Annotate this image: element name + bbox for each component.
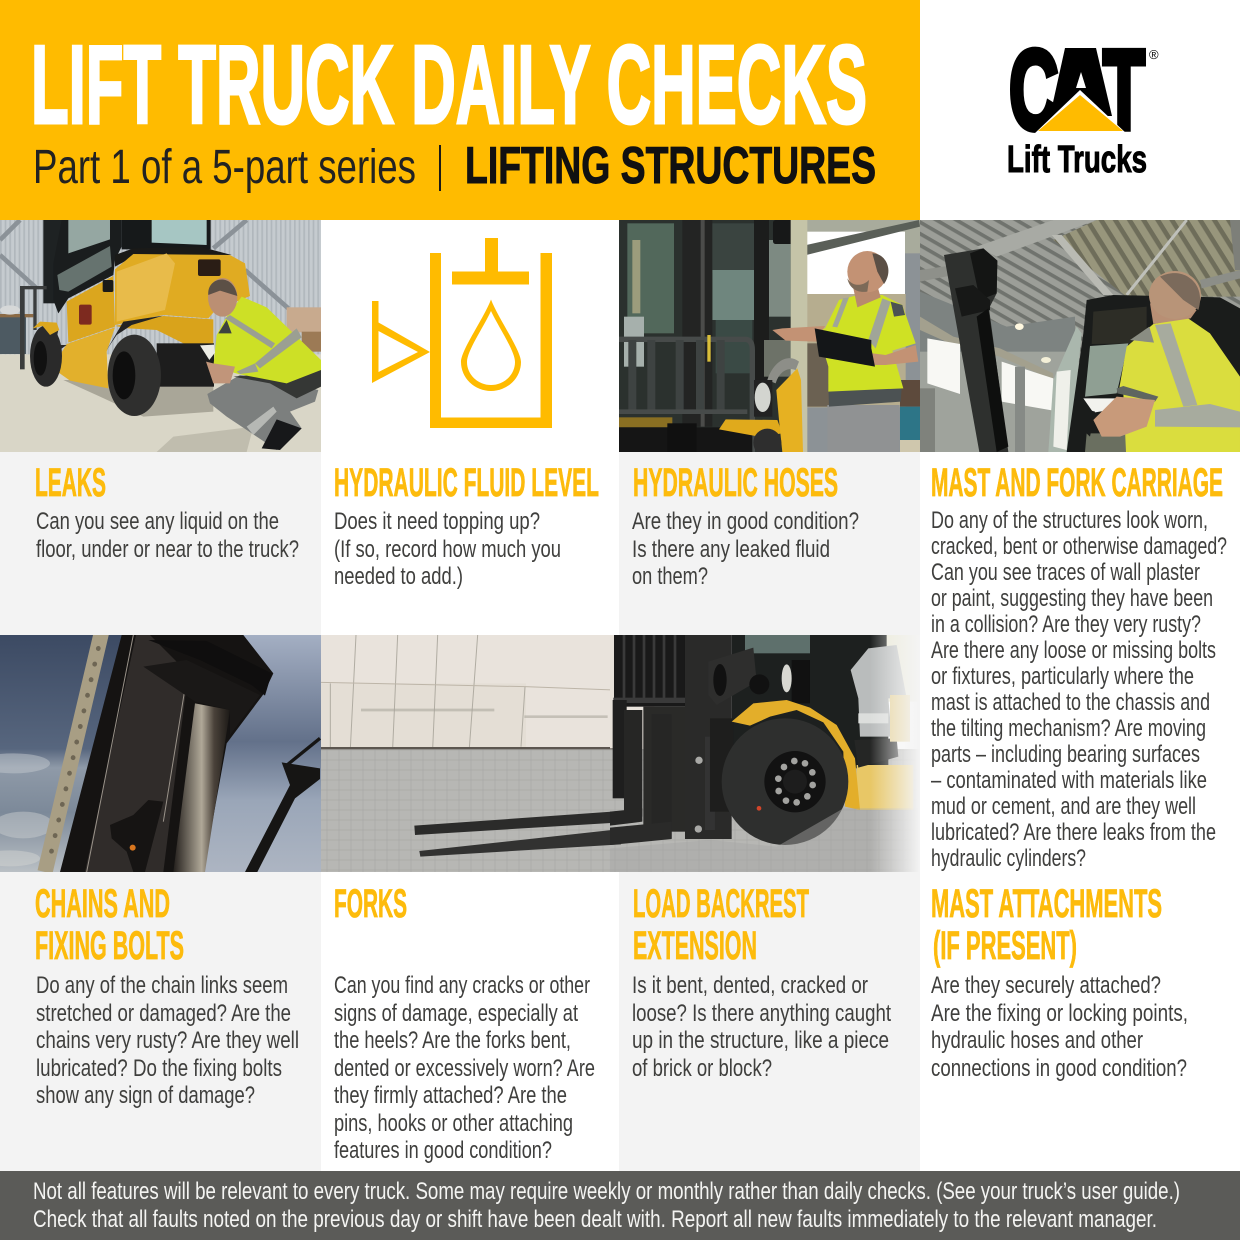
text: hydraulic fluid level: needed to add.) — [334, 563, 463, 590]
text: forks: Can you find any cracks or other — [334, 972, 590, 999]
heading: hydraulic hoses: HYDRAULIC HOSES — [633, 461, 838, 505]
text: forks: they firmly attached? Are the — [334, 1082, 567, 1109]
text: chains and fixing bolts: Do any of the chain links seem — [36, 972, 288, 999]
subtitle: topic: LIFTING STRUCTURES — [465, 137, 876, 195]
text: leaks: floor, under or near to the truck? — [36, 536, 299, 563]
text: forks: pins, hooks or other attaching — [334, 1110, 573, 1137]
footer note — [0, 1171, 1240, 1240]
logo: Cat Lift Trucks: Lift Trucks — [1007, 139, 1147, 181]
text: mast and fork carriage: hydraulic cylinders? — [931, 845, 1086, 872]
heading: chains and fixing bolts — [35, 882, 184, 968]
text: forks: the heels? Are the forks bent, — [334, 1027, 571, 1054]
photo: worker inspecting mast and fork carriage — [920, 220, 1240, 452]
text: mast attachments — [931, 972, 1188, 1082]
text: hydraulic fluid level: Does it need topping up? — [334, 508, 540, 535]
text: mast attachments: Are they securely attached? — [931, 972, 1161, 999]
text: load backrest extension: Is it bent, dented, cracked or — [632, 972, 868, 999]
logo: Cat Lift Trucks: CAT — [1009, 27, 1145, 153]
text: hydraulic hoses — [632, 508, 859, 590]
text: chains and fixing bolts: lubricated? Do the fixing bolts — [36, 1055, 282, 1082]
heading: load backrest extension: EXTENSION — [633, 924, 757, 968]
heading: hydraulic fluid level: HYDRAULIC FLUID LEVEL — [334, 461, 599, 505]
icon: hydraulic fluid level — [372, 238, 552, 428]
text: load backrest extension: of brick or block? — [632, 1055, 772, 1082]
text: hydraulic fluid level — [334, 508, 561, 590]
text: hydraulic hoses: on them? — [632, 563, 708, 590]
header banner — [0, 0, 920, 220]
heading: mast attachments — [931, 882, 1162, 968]
heading: load backrest extension: LOAD BACKREST — [633, 882, 809, 926]
text: mast attachments: hydraulic hoses and other — [931, 1027, 1143, 1054]
text: forks: signs of damage, especially at — [334, 1000, 578, 1027]
text: forks: dented or excessively worn? Are — [334, 1055, 595, 1082]
text: chains and fixing bolts: stretched or damaged? Are the — [36, 1000, 291, 1027]
logo: Cat Lift Trucks — [1007, 27, 1159, 181]
text: hydraulic hoses: Are they in good condition? — [632, 508, 859, 535]
heading: leaks: LEAKS — [35, 461, 106, 505]
text: leaks: Can you see any liquid on the — [36, 508, 279, 535]
heading: chains and fixing bolts: FIXING BOLTS — [35, 924, 184, 968]
photo: worker inspecting truck for leaks — [0, 220, 321, 452]
text: leaks — [36, 508, 299, 563]
text: forks — [334, 972, 595, 1164]
photo: chain and fixing bolts — [0, 632, 321, 872]
heading: forks: FORKS — [334, 882, 407, 926]
text: mast and fork carriage — [931, 507, 1227, 872]
text: hydraulic hoses: Is there any leaked fluid — [632, 536, 830, 563]
heading: mast attachments: (IF PRESENT) — [933, 924, 1077, 968]
text: forks: features in good condition? — [334, 1137, 552, 1164]
text: hydraulic fluid level: (If so, record how much you — [334, 536, 561, 563]
text: chains and fixing bolts: chains very rusty? Are they well — [36, 1027, 299, 1054]
heading: load backrest extension — [633, 882, 809, 968]
text: load backrest extension — [632, 972, 891, 1082]
subtitle: series: Part 1 of a 5-part series — [33, 141, 416, 194]
text: load backrest extension: up in the structure, like a piece — [632, 1027, 889, 1054]
heading: chains and fixing bolts: CHAINS AND — [35, 882, 170, 926]
photo: forks and front wheel — [321, 635, 920, 872]
text: chains and fixing bolts — [36, 972, 299, 1109]
text: load backrest extension: loose? Is there anything caught — [632, 1000, 891, 1027]
logo: Cat Lift Trucks: ® — [1149, 47, 1159, 62]
forks — [414, 811, 621, 857]
text: chains and fixing bolts: show any sign of damage? — [36, 1082, 255, 1109]
photo: worker inspecting hydraulic hoses — [619, 220, 920, 457]
